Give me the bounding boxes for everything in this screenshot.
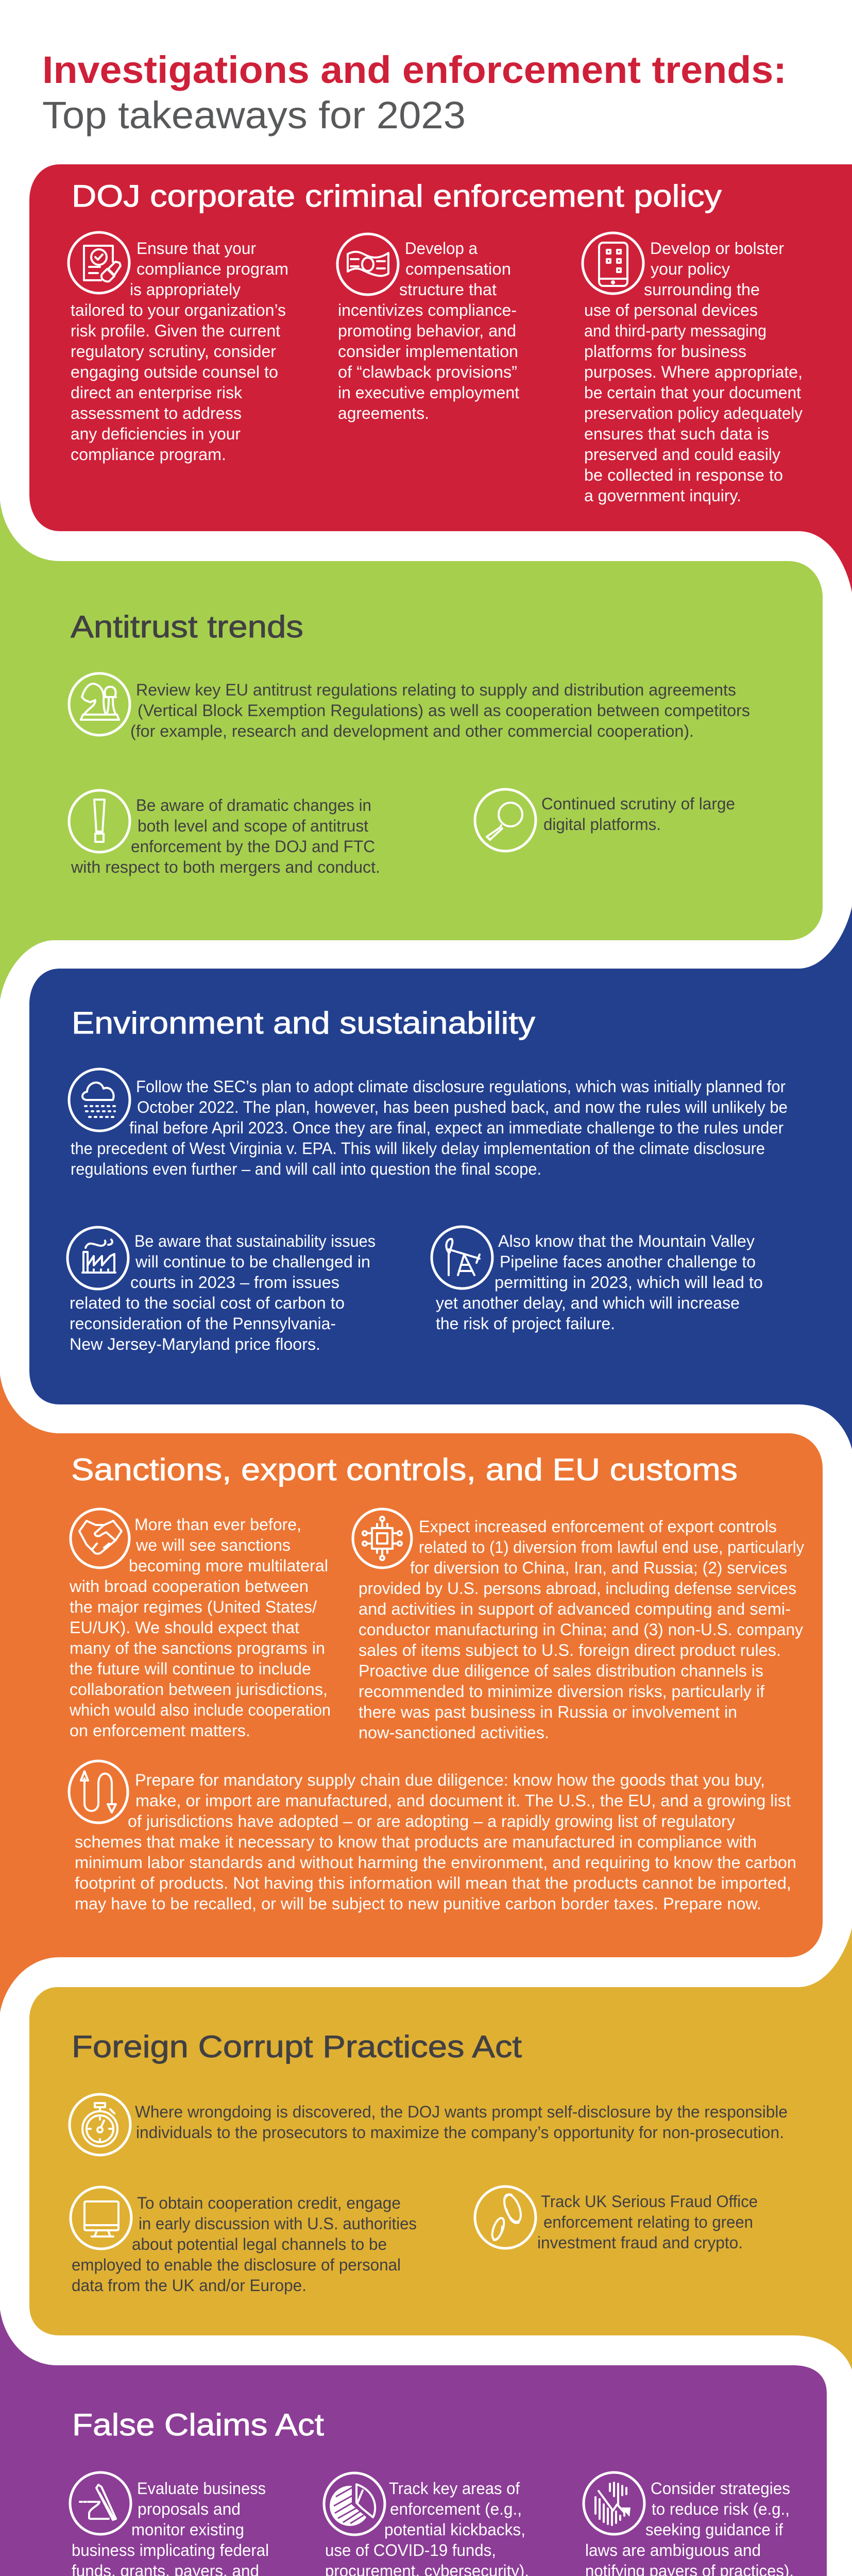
text: compensation structure: promoting behavior, and [338, 321, 516, 340]
text: EU antitrust regulations [130, 681, 750, 740]
text: export controls: sales of items subject to U.S. foreign direct product rules. [359, 1641, 781, 1659]
text: personal devices: platforms for business [584, 342, 746, 361]
icon: magnifying glass [475, 789, 536, 851]
text: compliance program: engaging outside counsel to [71, 363, 278, 381]
text: sanctions multilateral: More than ever before, [134, 1515, 301, 1534]
text: self-disclosure: individuals to the prosecutors to maximize the company’s opportunity for non-prosecution. [136, 2123, 784, 2142]
text: Mountain Valley Pipeline [436, 1232, 763, 1333]
text: compensation structure: structure that [399, 280, 497, 299]
text: sustainability issues: related to the social cost of carbon to [70, 1294, 345, 1312]
text: export controls [359, 1517, 804, 1742]
title [42, 48, 787, 137]
icon: falling chart [584, 2472, 644, 2534]
text: sanctions multilateral: with broad cooperation between [69, 1577, 309, 1596]
text: Mountain Valley Pipeline: Also know that the Mountain Valley [498, 1232, 755, 1250]
text: reduce risk: seeking guidance if [645, 2520, 783, 2539]
text: supply chain: may have to be recalled, or will be subject to new punitive carbon border taxes. Prepare now. [75, 1894, 761, 1913]
text: supply chain: Prepare for mandatory supply chain due diligence: know how the goods that you buy, [135, 1771, 765, 1789]
text: personal devices: surrounding the [644, 280, 760, 299]
icon: supply chain arrows [69, 1761, 128, 1823]
icon: exclamation mark [69, 790, 130, 852]
text: compensation structure: Develop a [405, 239, 478, 258]
text: cooperation credit: in early discussion with U.S. authorities [139, 2214, 417, 2233]
text: digital platforms [541, 794, 735, 834]
text: sanctions multilateral: many of the sanctions programs in [70, 1639, 325, 1657]
icon: coins [475, 2187, 536, 2248]
text: cooperation credit [72, 2194, 417, 2295]
text: digital platforms: Continued scrutiny of large [541, 794, 735, 813]
text: personal devices: preserved and could easily [584, 445, 780, 464]
heading: False Claims: False Claims Act [72, 2408, 324, 2442]
text: compliance program: tailored to your organization’s [71, 301, 286, 319]
text: cooperation credit: To obtain cooperation credit, engage [137, 2194, 401, 2212]
text: compensation structure: incentivizes compliance- [338, 301, 517, 319]
text: compliance program: compliance program. [71, 445, 226, 464]
text: EU antitrust regulations: (for example, research and development and other commercial cooperation). [130, 722, 694, 740]
panel: Sanctions, export controls, and EU customs [0, 1375, 823, 2013]
text: reduce risk: laws are ambiguous and [585, 2541, 761, 2560]
text: UK SFO: investment fraud and crypto. [537, 2233, 743, 2252]
text: export controls: and activities in support of advanced computing and semi- [359, 1600, 791, 1618]
icon: pen signing [70, 2472, 131, 2534]
text: dramatic changes: both level and scope of antitrust [138, 817, 368, 835]
text: sanctions multilateral: which would also include cooperation [69, 1701, 331, 1719]
text: supply chain: schemes that make it necessary to know that products are manufactured in compliance with [75, 1833, 757, 1851]
text: SEC climate: Follow the SEC’s plan to adopt climate disclosure regulations, which was initially planned for [136, 1077, 786, 1096]
text: reduce risk [585, 2479, 794, 2576]
text: personal devices [584, 239, 803, 505]
text: dramatic changes: with respect to both mergers and conduct. [71, 858, 380, 876]
text: SEC climate: October 2022. The plan, however, has been pushed back, and now the rules will unlikely be [137, 1098, 788, 1116]
text: export controls: Proactive due diligence of sales distribution channels is [359, 1662, 763, 1680]
text: business proposals: proposals and [138, 2500, 241, 2518]
panel: Antitrust trends [0, 501, 823, 1000]
text: EU antitrust regulations: Review key EU antitrust regulations relating to supply and distribution agreements [136, 681, 736, 699]
text: cooperation credit: about potential legal channels to be [132, 2235, 387, 2253]
text: SEC climate: final before April 2023. Once they are final, expect an immediate challenge to the rules under [129, 1118, 783, 1137]
text: self-disclosure: Where wrongdoing is discovered, the DOJ wants prompt self-disclosure by the responsible [135, 2103, 788, 2121]
heading: Antitrust: Antitrust trends [71, 609, 303, 644]
text: cooperation credit: data from the UK and/or Europe. [72, 2276, 306, 2295]
panel: Foreign Corrupt Practices Act [29, 1928, 852, 2370]
text: Mountain Valley Pipeline: permitting in 2023, which will lead to [495, 1273, 763, 1292]
text: compliance program: risk profile. Given the current [71, 321, 280, 340]
icon: smartphone [583, 233, 643, 294]
text: self-disclosure [135, 2103, 788, 2142]
icon: stopwatch [70, 2094, 130, 2155]
panel: DOJ corporate criminal enforcement policy [29, 164, 852, 592]
text: sustainability issues: will continue to be challenged in [135, 1252, 370, 1271]
text: business proposals: business implicating federal [72, 2541, 269, 2560]
text: sustainability issues: reconsideration of the Pennsylvania- [70, 1314, 336, 1333]
title: Investigations and enforcement trends: [42, 48, 787, 91]
text: compliance program [71, 239, 288, 464]
text: business proposals [72, 2479, 269, 2576]
text: export controls: for diversion to China, Iran, and Russia; (2) services [410, 1558, 787, 1577]
text: compliance program: is appropriately [130, 280, 241, 299]
text: compliance program: regulatory scrutiny, consider [71, 342, 276, 361]
panel: False Claims Act [0, 2310, 827, 2576]
text: key areas: Track key areas of [389, 2479, 520, 2498]
text: personal devices: preservation policy adequately [584, 404, 803, 422]
text: compensation structure: in executive employment [338, 383, 519, 402]
text: SEC climate: the precedent of West Virginia v. EPA. This will likely delay implementation of the climate disclosure [71, 1139, 765, 1158]
icon: computer monitor [71, 2187, 131, 2249]
text: compliance program: direct an enterprise risk [71, 383, 243, 402]
text: sanctions multilateral: collaboration between jurisdictions, [70, 1680, 328, 1699]
icon: banknote [337, 234, 398, 295]
text: export controls: provided by U.S. persons abroad, including defense services [359, 1579, 796, 1598]
text: compliance program: compliance program [137, 260, 288, 278]
text: dramatic changes: Be aware of dramatic changes in [136, 796, 371, 815]
heading: Sanctions: Sanctions, export controls, and EU customs [71, 1452, 738, 1487]
text: sustainability issues: Be aware that sustainability issues [134, 1232, 376, 1250]
text: compensation structure: consider implementation [338, 342, 518, 361]
text: personal devices: a government inquiry. [584, 486, 741, 505]
text: supply chain: footprint of products. Not having this information will mean that the products cannot be imported, [75, 1874, 791, 1892]
heading: DOJ: DOJ corporate criminal enforcement policy [72, 179, 722, 213]
text: export controls: conductor manufacturing in China; and (3) non-U.S. company [359, 1620, 803, 1639]
text: sustainability issues [70, 1232, 376, 1353]
text: reduce risk: to reduce risk (e.g., [652, 2500, 790, 2518]
text: sanctions multilateral: EU/UK). We should expect that [70, 1618, 299, 1637]
text: UK SFO: Track UK Serious Fraud Office [541, 2192, 758, 2211]
text: supply chain: of jurisdictions have adopted – or are adopting – a rapidly growing list of regulatory [128, 1812, 735, 1831]
text: key areas [325, 2479, 529, 2576]
icon: pie chart [324, 2473, 385, 2535]
text: business proposals: monitor existing [131, 2520, 244, 2539]
text: export controls: recommended to minimize diversion risks, particularly if [359, 1682, 764, 1701]
text: EU antitrust regulations: (Vertical Block Exemption Regulations) as well as cooperation between competitors [138, 701, 750, 720]
text: personal devices: and third-party messaging [584, 321, 766, 340]
text: sustainability issues: courts in 2023 – from issues [130, 1273, 339, 1292]
text: dramatic changes: enforcement by the DOJ and FTC [131, 837, 375, 856]
text: sanctions multilateral: becoming more multilateral [129, 1556, 328, 1575]
text: personal devices: be certain that your document [584, 383, 801, 402]
text: export controls: there was past business in Russia or involvement in [359, 1703, 737, 1721]
heading: FCPA: Foreign Corrupt Practices Act [72, 2029, 522, 2064]
text: export controls: Expect increased enforcement of export controls [419, 1517, 777, 1536]
icon: oil pumpjack [432, 1227, 492, 1289]
text: reduce risk: Consider strategies [651, 2479, 790, 2498]
text: compensation structure: compensation [405, 260, 511, 278]
icon: factory [67, 1227, 128, 1289]
text: compliance program: Ensure that your [137, 239, 256, 258]
text: sanctions multilateral: the future will continue to include [70, 1659, 311, 1678]
icon: handshake [71, 1509, 129, 1568]
text: compensation structure [338, 239, 519, 422]
icon: document with stamp [69, 232, 129, 293]
text: compliance program: assessment to address [71, 404, 242, 422]
heading: Environment: Environment and sustainability [72, 1006, 535, 1040]
text: sustainability issues: New Jersey-Maryland price floors. [70, 1335, 320, 1353]
text: key areas: use of COVID-19 funds, [325, 2541, 496, 2560]
icon: chess pieces [69, 673, 130, 735]
text: export controls: related to (1) diversion from lawful end use, particularly [419, 1538, 804, 1556]
text: sanctions multilateral [69, 1515, 331, 1740]
text: UK SFO: enforcement relating to green [543, 2213, 753, 2231]
icon: cloud and rain [69, 1069, 130, 1131]
text: personal devices: purposes. Where appropriate, [584, 363, 803, 381]
text: dramatic changes [71, 796, 380, 876]
text: Mountain Valley Pipeline: yet another delay, and which will increase [436, 1294, 740, 1312]
icon: microchip [353, 1509, 412, 1568]
text: sanctions multilateral: the major regimes (United States/ [70, 1598, 317, 1616]
text: compliance program: any deficiencies in your [71, 425, 241, 443]
text: key areas: potential kickbacks, [384, 2520, 525, 2539]
text: personal devices: ensures that such data is [584, 425, 769, 443]
panel: Environment and sustainability [29, 907, 852, 1449]
text: personal devices: Develop or bolster [650, 239, 784, 258]
text: business proposals: Evaluate business [137, 2479, 266, 2498]
text: Mountain Valley Pipeline: the risk of project failure. [436, 1314, 615, 1333]
text: supply chain: minimum labor standards and without harming the environment, and requiring to know the carbon [75, 1853, 796, 1872]
text: digital platforms: digital platforms. [543, 815, 661, 834]
text: personal devices: your policy [651, 260, 730, 278]
text: export controls: now-sanctioned activities. [359, 1723, 549, 1742]
text: compensation structure: of “clawback provisions” [338, 363, 517, 381]
text: key areas: enforcement (e.g., [390, 2500, 522, 2518]
text: SEC climate: regulations even further – and will call into question the final scope. [71, 1160, 541, 1178]
text: personal devices: use of personal devices [584, 301, 758, 319]
text: sanctions multilateral: on enforcement matters. [70, 1721, 250, 1740]
text: supply chain: make, or import are manufactured, and document it. The U.S., the EU, and a growing list [135, 1791, 791, 1810]
title: Top takeaways for 2023 [42, 94, 466, 137]
text: supply chain [75, 1771, 796, 1913]
text: compensation structure: agreements. [338, 404, 429, 422]
text: sanctions multilateral: we will see sanctions [135, 1536, 291, 1554]
text: UK SFO [537, 2192, 758, 2252]
text: SEC climate [71, 1077, 788, 1178]
text: personal devices: be collected in response to [584, 466, 783, 484]
text: cooperation credit: employed to enable the disclosure of personal [72, 2256, 401, 2274]
text: Mountain Valley Pipeline: Pipeline faces another challenge to [500, 1252, 756, 1271]
